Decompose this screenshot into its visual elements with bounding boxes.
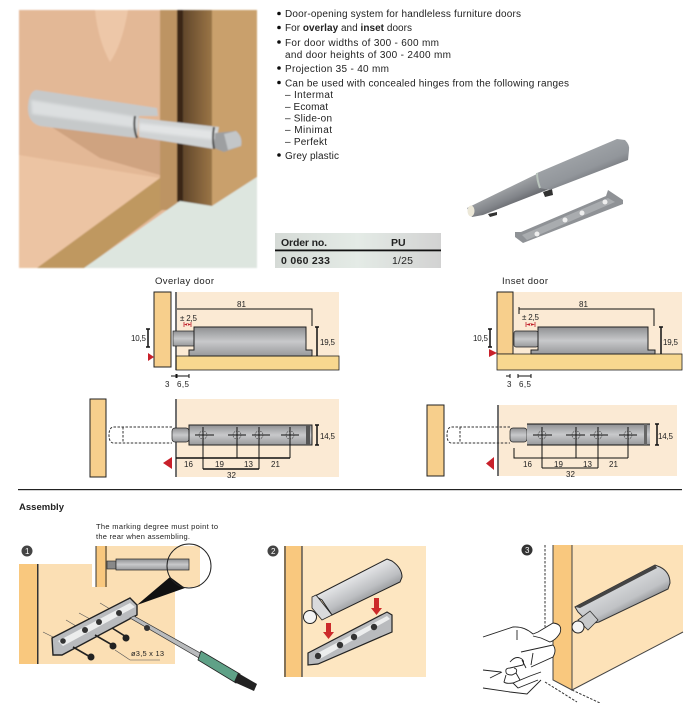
step 3 number	[522, 544, 532, 556]
overlay top view dimensions: 21	[271, 460, 280, 469]
photo: shelf top	[19, 155, 160, 268]
step 2 number: 2	[271, 547, 276, 556]
inset side view	[473, 292, 682, 389]
step 1 screwdriver	[130, 616, 257, 691]
photo: door face	[212, 10, 257, 206]
photo: door edge	[182, 10, 212, 206]
inset title: Inset door	[502, 276, 548, 287]
step 1 caption: the rear when assembling.	[96, 532, 190, 541]
inset top view dimensions: 32	[566, 470, 575, 479]
step 3 latch	[572, 565, 670, 633]
step 2 latch	[304, 559, 402, 624]
inset top view dimensions: 13	[583, 460, 592, 469]
overlay red marker	[148, 353, 154, 361]
step 3 cabinet side	[553, 545, 683, 690]
photo: floor	[84, 177, 257, 268]
photo: wood grain highlight	[95, 10, 128, 62]
bullet 5 with hinge ranges: – Ecomat	[285, 102, 328, 113]
step 1 number	[22, 546, 32, 556]
bullet 1: Door-opening system for handleless furniture doors	[285, 9, 521, 20]
bullet 6: Grey plastic	[285, 151, 339, 162]
render: piston	[467, 170, 552, 217]
inset screw positions	[533, 427, 637, 468]
bullet 5 with hinge ranges: – Intermat	[285, 90, 333, 101]
table header: PU	[391, 237, 406, 249]
product render: latch and mounting plate	[467, 139, 629, 243]
bullet 5 with hinge ranges: – Perfekt	[285, 137, 327, 148]
overlay dimension lines: ± 2,5	[180, 314, 198, 323]
inset dimension lines: 6,5	[519, 380, 532, 389]
bullet 3: and door heights of 300 - 2400 mm	[285, 50, 451, 61]
inset top red marker	[486, 457, 494, 470]
table row: 0 060 233	[281, 255, 330, 267]
overlay side view	[131, 292, 339, 389]
inset red marker	[489, 349, 497, 357]
overlay top red marker	[163, 457, 172, 469]
overlay top view dimensions: 16	[184, 460, 193, 469]
photo: latch piston highlight	[139, 123, 217, 140]
step 2 mounting plate	[308, 612, 392, 665]
step 3 hand	[483, 623, 561, 694]
overlay dimension lines: 81	[237, 300, 246, 309]
step 2 number	[268, 546, 278, 556]
inset top view dimensions: 21	[609, 460, 618, 469]
bullet 4: Projection 35 - 40 mm	[285, 64, 389, 75]
inset dimension lines: 19,5	[663, 338, 679, 347]
assembly step 3	[483, 544, 683, 703]
inset dimension lines: 3	[507, 380, 512, 389]
overlay door diagrams	[90, 276, 339, 480]
inset dimension lines	[473, 300, 679, 389]
inset top view dimensions: 19	[554, 460, 563, 469]
photo: cabinet side	[160, 10, 177, 210]
bullet 5 with hinge ranges: – Slide-on	[285, 114, 332, 124]
photo: dark door gap	[177, 10, 183, 202]
table row	[281, 255, 413, 267]
assembly step 2	[268, 546, 426, 677]
inset top view	[427, 405, 677, 479]
render: mounting plate	[515, 190, 623, 243]
overlay screw positions	[195, 427, 299, 469]
inset dimension lines: 81	[579, 300, 588, 309]
photo: latch body highlight	[31, 100, 137, 128]
inset dimension lines: ± 2,5	[522, 313, 540, 322]
feature list	[277, 9, 569, 162]
step 1 caption: The marking degree must point to	[96, 522, 218, 531]
overlay top view dimensions	[176, 425, 336, 480]
overlay dimension lines: 10,5	[131, 334, 147, 343]
render: body collar	[537, 173, 540, 188]
photo: latch body	[28, 90, 158, 138]
inset top view dimensions	[514, 424, 674, 479]
bullet 5 with hinge ranges: – Minimat	[285, 125, 332, 136]
step 1 screw label	[115, 649, 164, 660]
order table	[275, 233, 441, 268]
bullet 3	[277, 38, 451, 61]
bullet 2: For overlay and inset doors	[285, 23, 412, 34]
step 2 background and door	[284, 546, 426, 677]
step 1 caption	[96, 522, 218, 541]
photo: shadow under latch	[50, 126, 160, 175]
bullet 5 with hinge ranges	[277, 78, 569, 148]
overlay top view	[90, 399, 339, 480]
table header: Order no.	[281, 237, 327, 249]
photo: shelf front	[37, 178, 162, 268]
overlay dimension lines: 6,5	[177, 380, 190, 389]
step 1 background and door	[19, 564, 175, 664]
inset dimension lines: 10,5	[473, 334, 489, 343]
overlay dimension lines	[131, 300, 336, 389]
overlay title: Overlay door	[155, 276, 214, 287]
step 2 red arrows	[323, 598, 382, 639]
overlay top view dimensions: 14,5	[320, 432, 336, 441]
photo: latch tip	[214, 131, 241, 152]
step 1 mounting plate	[43, 598, 137, 655]
render: body	[537, 139, 629, 190]
table header	[281, 237, 406, 249]
step 3 guide lines	[545, 545, 600, 703]
step 1 number: 1	[25, 547, 30, 556]
step 1 screws	[73, 628, 130, 660]
table row: 1/25	[392, 255, 413, 267]
step 1 screw label: ø3,5 x 13	[131, 649, 164, 658]
overlay dimension lines: 19,5	[320, 338, 336, 347]
overlay dimension lines: 3	[165, 380, 170, 389]
bullet 3: For door widths of 300 - 600 mm	[285, 38, 439, 49]
inset door diagrams	[427, 276, 682, 479]
assembly heading: Assembly	[19, 502, 65, 513]
step 3 number: 3	[525, 546, 530, 555]
product photo: touch latch in cabinet	[19, 10, 257, 268]
inset top view dimensions: 16	[523, 460, 532, 469]
overlay top view dimensions: 19	[215, 460, 224, 469]
photo: latch piston	[139, 118, 219, 149]
overlay top view dimensions: 13	[244, 460, 253, 469]
step 1 magnified inset	[96, 544, 211, 605]
overlay top view dimensions: 32	[227, 471, 236, 480]
bullet 5 with hinge ranges: Can be used with concealed hinges from the following ranges	[285, 78, 569, 90]
inset top view dimensions: 14,5	[658, 432, 674, 441]
assembly step 1	[19, 522, 257, 691]
